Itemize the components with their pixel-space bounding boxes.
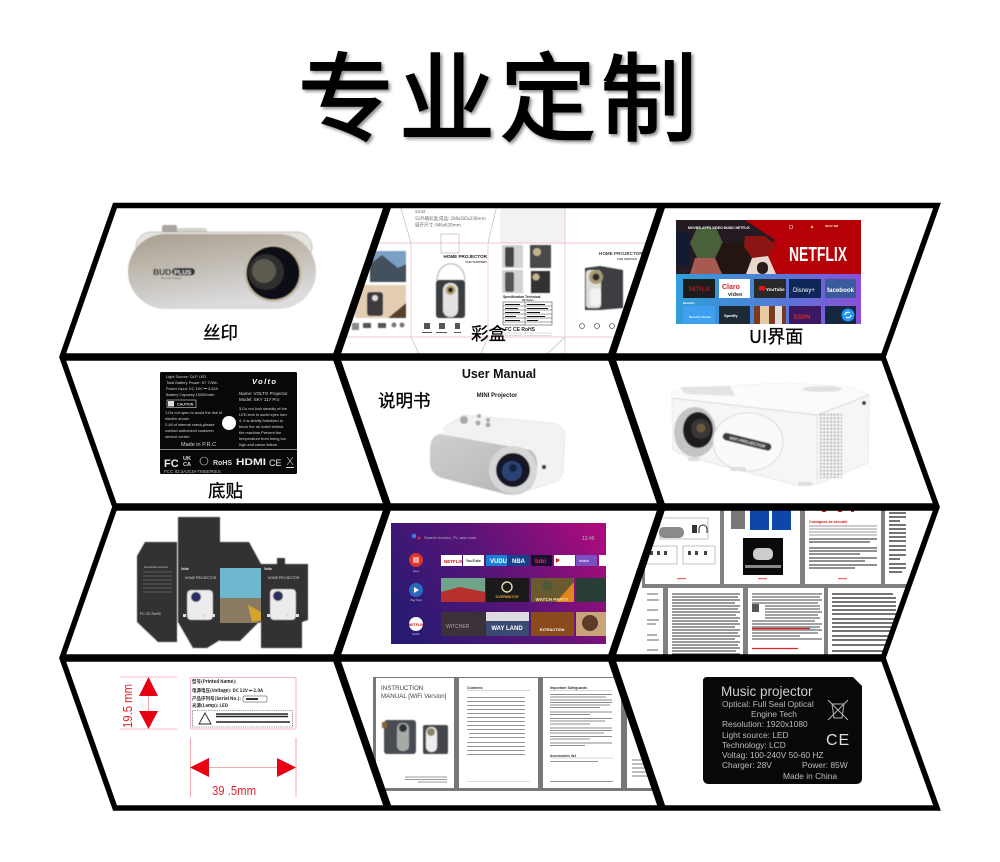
black label: HDMI xyxy=(236,457,266,467)
screenshot: Netflix home: Spotify xyxy=(724,313,738,318)
black label xyxy=(160,372,297,474)
panel: color box dieline: HOME PROJECTOR xyxy=(599,251,643,256)
black label: block the air outlet behind xyxy=(239,424,283,429)
black label: Model: SKY 117 Pro xyxy=(239,397,280,402)
vents xyxy=(820,413,842,478)
black label: 4. It is strictly forbidden to xyxy=(239,418,283,423)
panel: Android TV screen: WATCH PARTY xyxy=(535,597,569,602)
spec table: FC CE RoHS xyxy=(505,327,536,333)
screenshot: Netflix home: Disney+ xyxy=(793,288,815,294)
spec lines: Charger: 28V xyxy=(722,760,772,770)
black label: UK xyxy=(183,456,191,462)
panel: Android TV screen: VUDU xyxy=(490,559,507,565)
lens xyxy=(674,407,716,457)
panel: silk print xyxy=(128,225,316,345)
panel: UI screen xyxy=(676,220,861,349)
subheading: MINI Projector: MINI Projector xyxy=(477,393,518,399)
black label: LED lens to avoid eyes hurt. xyxy=(239,412,288,417)
sticker specimen: 光源(Lamp): LED xyxy=(192,702,228,709)
icon: silver projector xyxy=(128,225,316,309)
dimension 19.5 mm xyxy=(120,677,177,729)
panel: Android TV screen: NBA xyxy=(512,559,526,565)
label heading: Music projector xyxy=(721,684,813,699)
panel: bottom sticker xyxy=(160,372,297,503)
spec lines xyxy=(722,699,848,781)
dieline rules xyxy=(345,205,650,356)
icon: white mini projector xyxy=(430,414,565,495)
black label: Power Input: DC 19V ⎓ 3.42A xyxy=(166,386,218,391)
screenshot: Netflix home: ESPN xyxy=(794,315,810,321)
panel: box dieline dark: Volto xyxy=(181,567,189,571)
panel: color box dieline: FHD SERVICE xyxy=(617,257,637,261)
panel: manual spreads xyxy=(642,507,908,658)
screenshot: Netflix home: MOVIES APPS VIDEO MUSIC NETFLIX xyxy=(688,226,750,230)
label: 彩盒: 彩盒 xyxy=(471,321,506,346)
title: 专业定制: 专业定制 xyxy=(300,24,704,163)
spec lines: Power: 85W xyxy=(802,760,848,770)
screenshot: Netflix home: 06:07 AM xyxy=(825,224,839,228)
panel: Android TV screen: 12:45 xyxy=(582,536,595,542)
front heading: HOME PROJECTOR xyxy=(443,254,488,259)
panel: color box dieline xyxy=(346,208,646,354)
page six text xyxy=(672,594,740,654)
panel: box dieline dark: Specification technical xyxy=(144,566,168,569)
black label: high and cause failure. xyxy=(239,442,278,447)
spec lines: Engine Tech xyxy=(751,709,797,719)
panel: white projector: WIFI PROJECTOR xyxy=(729,435,767,449)
panel: color box dieline: 展开尺寸: 846x620mm xyxy=(415,222,461,228)
black label: FCC ID:2AJCM-TMSERIES xyxy=(164,469,221,474)
black label: CA xyxy=(183,462,191,468)
panel: Android TV screen: YouTube xyxy=(466,559,481,563)
spec table xyxy=(503,295,552,336)
sticker specimen: 型号(Printed Name): xyxy=(192,678,237,685)
spec lines: Light source: LED xyxy=(722,730,789,740)
title: 专业定制: 专业定制 xyxy=(298,22,702,161)
icon: box projector xyxy=(436,264,465,318)
panel: Android TV screen: Search movies, TV, and more xyxy=(424,535,477,540)
black label: electric shock. xyxy=(165,416,190,421)
box flaps xyxy=(403,210,497,243)
black label: CAUTION xyxy=(177,402,194,406)
label: 丝印: 丝印 xyxy=(203,320,238,345)
panel: white projector xyxy=(672,383,869,486)
oval plate xyxy=(713,413,783,471)
thumbnails xyxy=(502,245,551,293)
panel: box dieline dark: HOME PROJECTOR xyxy=(185,576,217,580)
black label: Made in P.R.C xyxy=(181,442,216,448)
screenshot: Netflix home: facebook xyxy=(827,287,854,294)
page three text: Consignes de sécurité xyxy=(809,520,847,524)
black label: FC xyxy=(164,458,179,470)
black label: Total Battery Power: 57.72Wh xyxy=(166,380,217,385)
panel: box dieline dark xyxy=(137,517,308,648)
icon: silver projector: BUD xyxy=(153,267,171,277)
page three text xyxy=(809,507,877,579)
panel: label dimensions xyxy=(120,677,296,798)
icon: recycle bin crossed xyxy=(828,700,848,720)
panel: Android TV screen: NETFLIX xyxy=(409,623,424,627)
screenshot: Netflix home: Claro xyxy=(722,284,740,291)
screenshot: Netflix home: Recently xyxy=(683,301,695,305)
panel: box dieline dark: FC CE RoHS xyxy=(140,612,161,616)
screenshot: Netflix home: YouTube xyxy=(766,287,785,292)
screenshot: Netflix home: NETFLIX xyxy=(789,243,847,266)
black label: CE xyxy=(269,458,282,468)
panel: Android TV screen: Play Next xyxy=(410,598,422,602)
page one diagram xyxy=(645,518,715,564)
screenshot: Netflix home: Recently Viewed xyxy=(689,315,711,319)
panel: color box dieline: S2外箱彩盒 成品: 208x205x238mm xyxy=(415,215,486,222)
dimension 19.5 mm: 19.5 mm xyxy=(121,684,135,728)
icon: silver projector: PLUS xyxy=(174,270,192,276)
panel: instruction booklet: Important Safeguards xyxy=(550,686,587,690)
panel: Android TV screen: Apps xyxy=(413,569,420,573)
black label: Light Source: DLP LED xyxy=(166,374,206,379)
panel: instruction booklet: Accessories list xyxy=(550,754,577,758)
black label: 3.Do not look steadily at the xyxy=(239,406,287,411)
screenshot: Netflix home xyxy=(676,220,861,324)
black label: RoHS xyxy=(213,460,232,467)
dimension 39.5mm: 39 .5mm xyxy=(212,784,256,798)
black label: 2.All of internal check,please xyxy=(165,422,215,427)
panel: color box dieline: FHD SUPPORT xyxy=(465,260,487,264)
panel: Android TV screen: tubi xyxy=(535,559,546,565)
mark: CE: CE xyxy=(826,732,850,749)
black label: Name: VOLTO Projector xyxy=(239,391,288,396)
panel: Android TV screen: twitch xyxy=(579,558,589,563)
panel: Android TV screen: WITCHER xyxy=(446,624,470,630)
panel: Android TV screen xyxy=(391,523,607,644)
black label: Volto xyxy=(252,377,276,386)
screenshot: Netflix home: video xyxy=(728,292,743,298)
sticker specimen: 电源电压(Voltage): DC 12V ⎓ 2.0A xyxy=(192,687,263,694)
sticker specimen: 产品序列号(Serial No.): xyxy=(192,695,241,702)
panel: instruction manual xyxy=(378,367,565,495)
black label: service center. xyxy=(165,434,190,439)
app tiles xyxy=(441,555,462,566)
spec table: HD Series xyxy=(522,299,534,302)
spec lines: Made in China xyxy=(783,771,837,781)
spec lines: Optical: Full Seal Optical xyxy=(722,699,814,709)
label: UI界面: UI界面 xyxy=(749,323,803,349)
black label: 1.Do not open to avoid the risk of xyxy=(165,410,223,415)
panel: Android TV screen: WAY LAND xyxy=(491,626,523,632)
panel: music projector label xyxy=(703,677,862,784)
panel: Android TV screen: NETFLIX xyxy=(444,559,463,564)
heading: User Manual: User Manual xyxy=(462,367,536,381)
panel: Android TV screen: OVERWATCH xyxy=(495,595,519,599)
black label: temperature from being too xyxy=(239,436,286,441)
screenshot: Netflix home: NETFLIX xyxy=(689,286,711,293)
row 2 xyxy=(441,578,485,592)
black label: Battery Capacity:15000mAh xyxy=(166,392,214,397)
icon: booklet projectors xyxy=(382,720,448,754)
spec lines: Voltag: 100-240V 50-60 HZ xyxy=(722,750,824,760)
spec lines: Resolution: 1920x1080 xyxy=(722,719,808,729)
panel: instruction booklet: INSTRUCTION xyxy=(381,685,423,692)
label: 说明书: 说明书 xyxy=(378,388,430,413)
panel: Android TV screen: Netflix xyxy=(412,632,420,636)
panel: Android TV screen: EXTRACTION xyxy=(540,628,565,632)
sticker specimen xyxy=(190,678,296,729)
spec lines: Technology: LCD xyxy=(722,740,786,750)
page two xyxy=(731,510,745,529)
icon: silver projector: Mini LED Projector xyxy=(161,277,182,280)
spec table: Specification Technical xyxy=(503,295,540,299)
photo panels xyxy=(352,251,406,330)
panel: instruction booklet: Contents xyxy=(467,686,483,690)
black label: the machine,Prevent the xyxy=(239,430,281,435)
dimension 39.5mm xyxy=(190,738,296,798)
black label: contact authorized customer xyxy=(165,428,215,433)
panel: box dieline dark: Volto xyxy=(264,567,272,571)
panel: box dieline dark: HOME PROJECTOR xyxy=(268,576,300,580)
row 3 xyxy=(441,612,485,636)
page seven text xyxy=(752,594,822,639)
size text: S242 xyxy=(415,209,426,214)
icon: right box projector xyxy=(585,266,623,310)
page eight text xyxy=(832,594,896,655)
grid: chevron frame lines xyxy=(62,205,937,808)
panel: instruction booklet xyxy=(373,677,667,791)
panel: instruction booklet: MANUAL [WiFi Version] xyxy=(381,693,447,700)
label: 底贴: 底贴 xyxy=(208,478,243,503)
